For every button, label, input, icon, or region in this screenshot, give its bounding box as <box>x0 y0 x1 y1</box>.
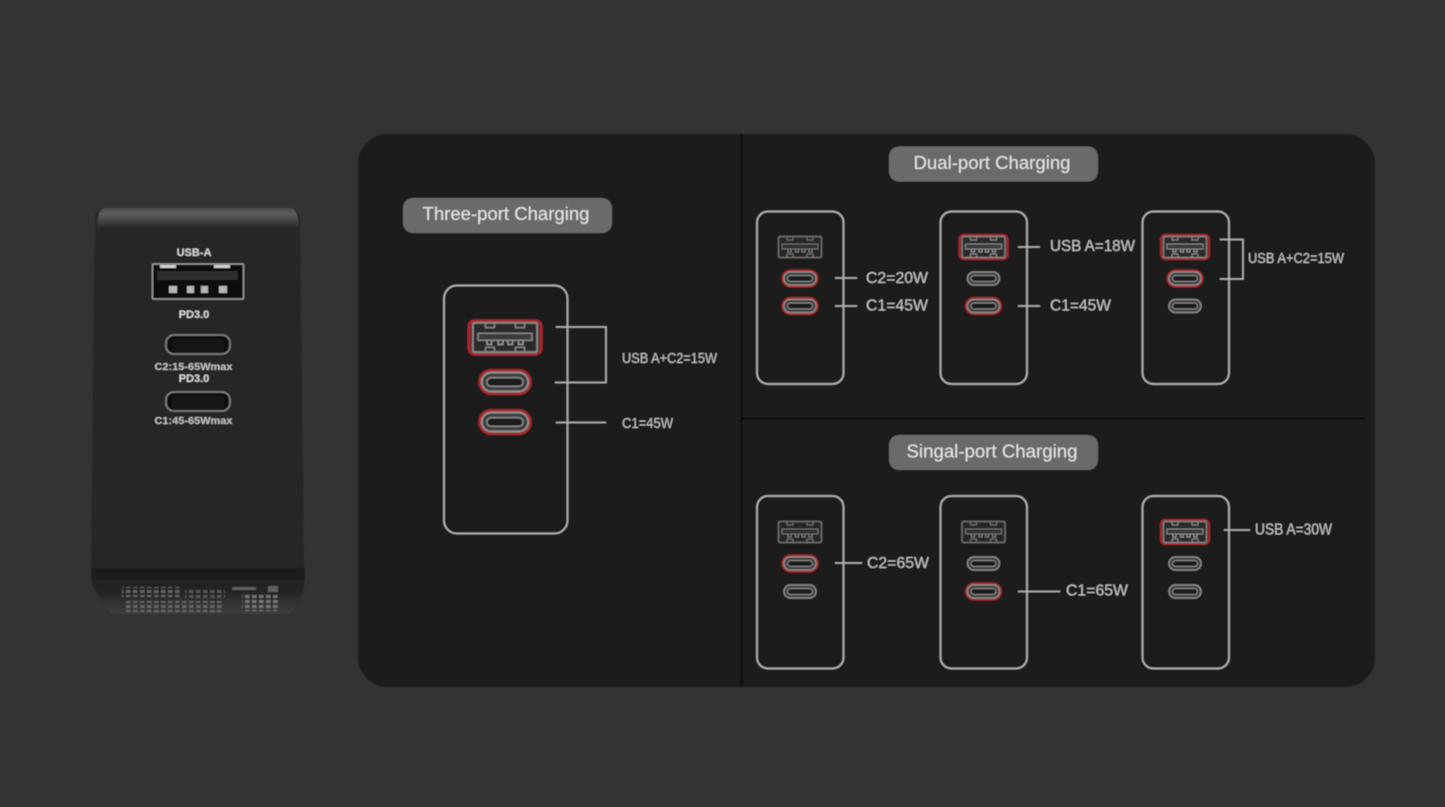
device 4 <box>757 496 862 668</box>
device 1 <box>757 212 857 384</box>
heading: single-port <box>889 435 1098 470</box>
label: C1: C1=45W <box>622 415 674 432</box>
device outline large <box>444 286 568 534</box>
PD3.0 label upper: PD3.0 <box>179 309 209 321</box>
label: C2=65W: C2=65W <box>867 555 930 572</box>
bracket USB A + C2 <box>555 327 606 382</box>
device 3 <box>1142 212 1243 384</box>
USB-A port <box>152 264 244 299</box>
charger product photo <box>91 208 305 614</box>
device 5 <box>940 496 1060 668</box>
heading: dual-port: Dual-port Charging <box>914 153 1070 173</box>
label: USB A+C2 dual: USB A+C2=15W <box>1248 250 1345 267</box>
USB-C port C2 <box>166 335 230 354</box>
charger bottom edge with regulatory print <box>91 568 305 614</box>
heading: three-port <box>403 198 612 233</box>
label: C2=20W: C2=20W <box>866 270 929 287</box>
PD3.0 label lower: PD3.0 <box>179 373 209 385</box>
panel: dual-port charging <box>757 146 1345 384</box>
port: USB A active <box>469 321 541 354</box>
C2 rating: C2:15-65Wmax <box>154 362 233 373</box>
panel: single-port charging <box>757 435 1333 668</box>
label: USB A+C2: USB A+C2=15W <box>622 350 718 367</box>
charger top edge highlight <box>97 208 299 228</box>
USB-A label: USB-A <box>177 247 211 259</box>
port: C1 active <box>480 410 530 434</box>
USB-C port C1 <box>166 392 230 411</box>
device 6 <box>1142 496 1250 668</box>
charger body <box>91 208 304 570</box>
label: USB A=18W: USB A=18W <box>1050 238 1136 255</box>
label: C1=45W: C1=45W <box>866 298 929 314</box>
panel: charging modes <box>358 134 1375 687</box>
C1 rating: C1:45-65Wmax <box>154 416 233 427</box>
label: C1=65W: C1=65W <box>1066 582 1129 600</box>
port: C2 active <box>480 370 530 394</box>
heading: single-port: Singal-port Charging <box>906 442 1078 462</box>
label: USB A=30W: USB A=30W <box>1255 522 1333 538</box>
panel: three-port charging <box>403 198 718 534</box>
label: C1=45W second: C1=45W <box>1050 298 1112 314</box>
device 2 <box>940 212 1040 384</box>
heading: three-port: Three-port Charging <box>422 204 590 224</box>
heading: dual-port <box>889 146 1098 182</box>
leader C1 <box>556 422 606 424</box>
